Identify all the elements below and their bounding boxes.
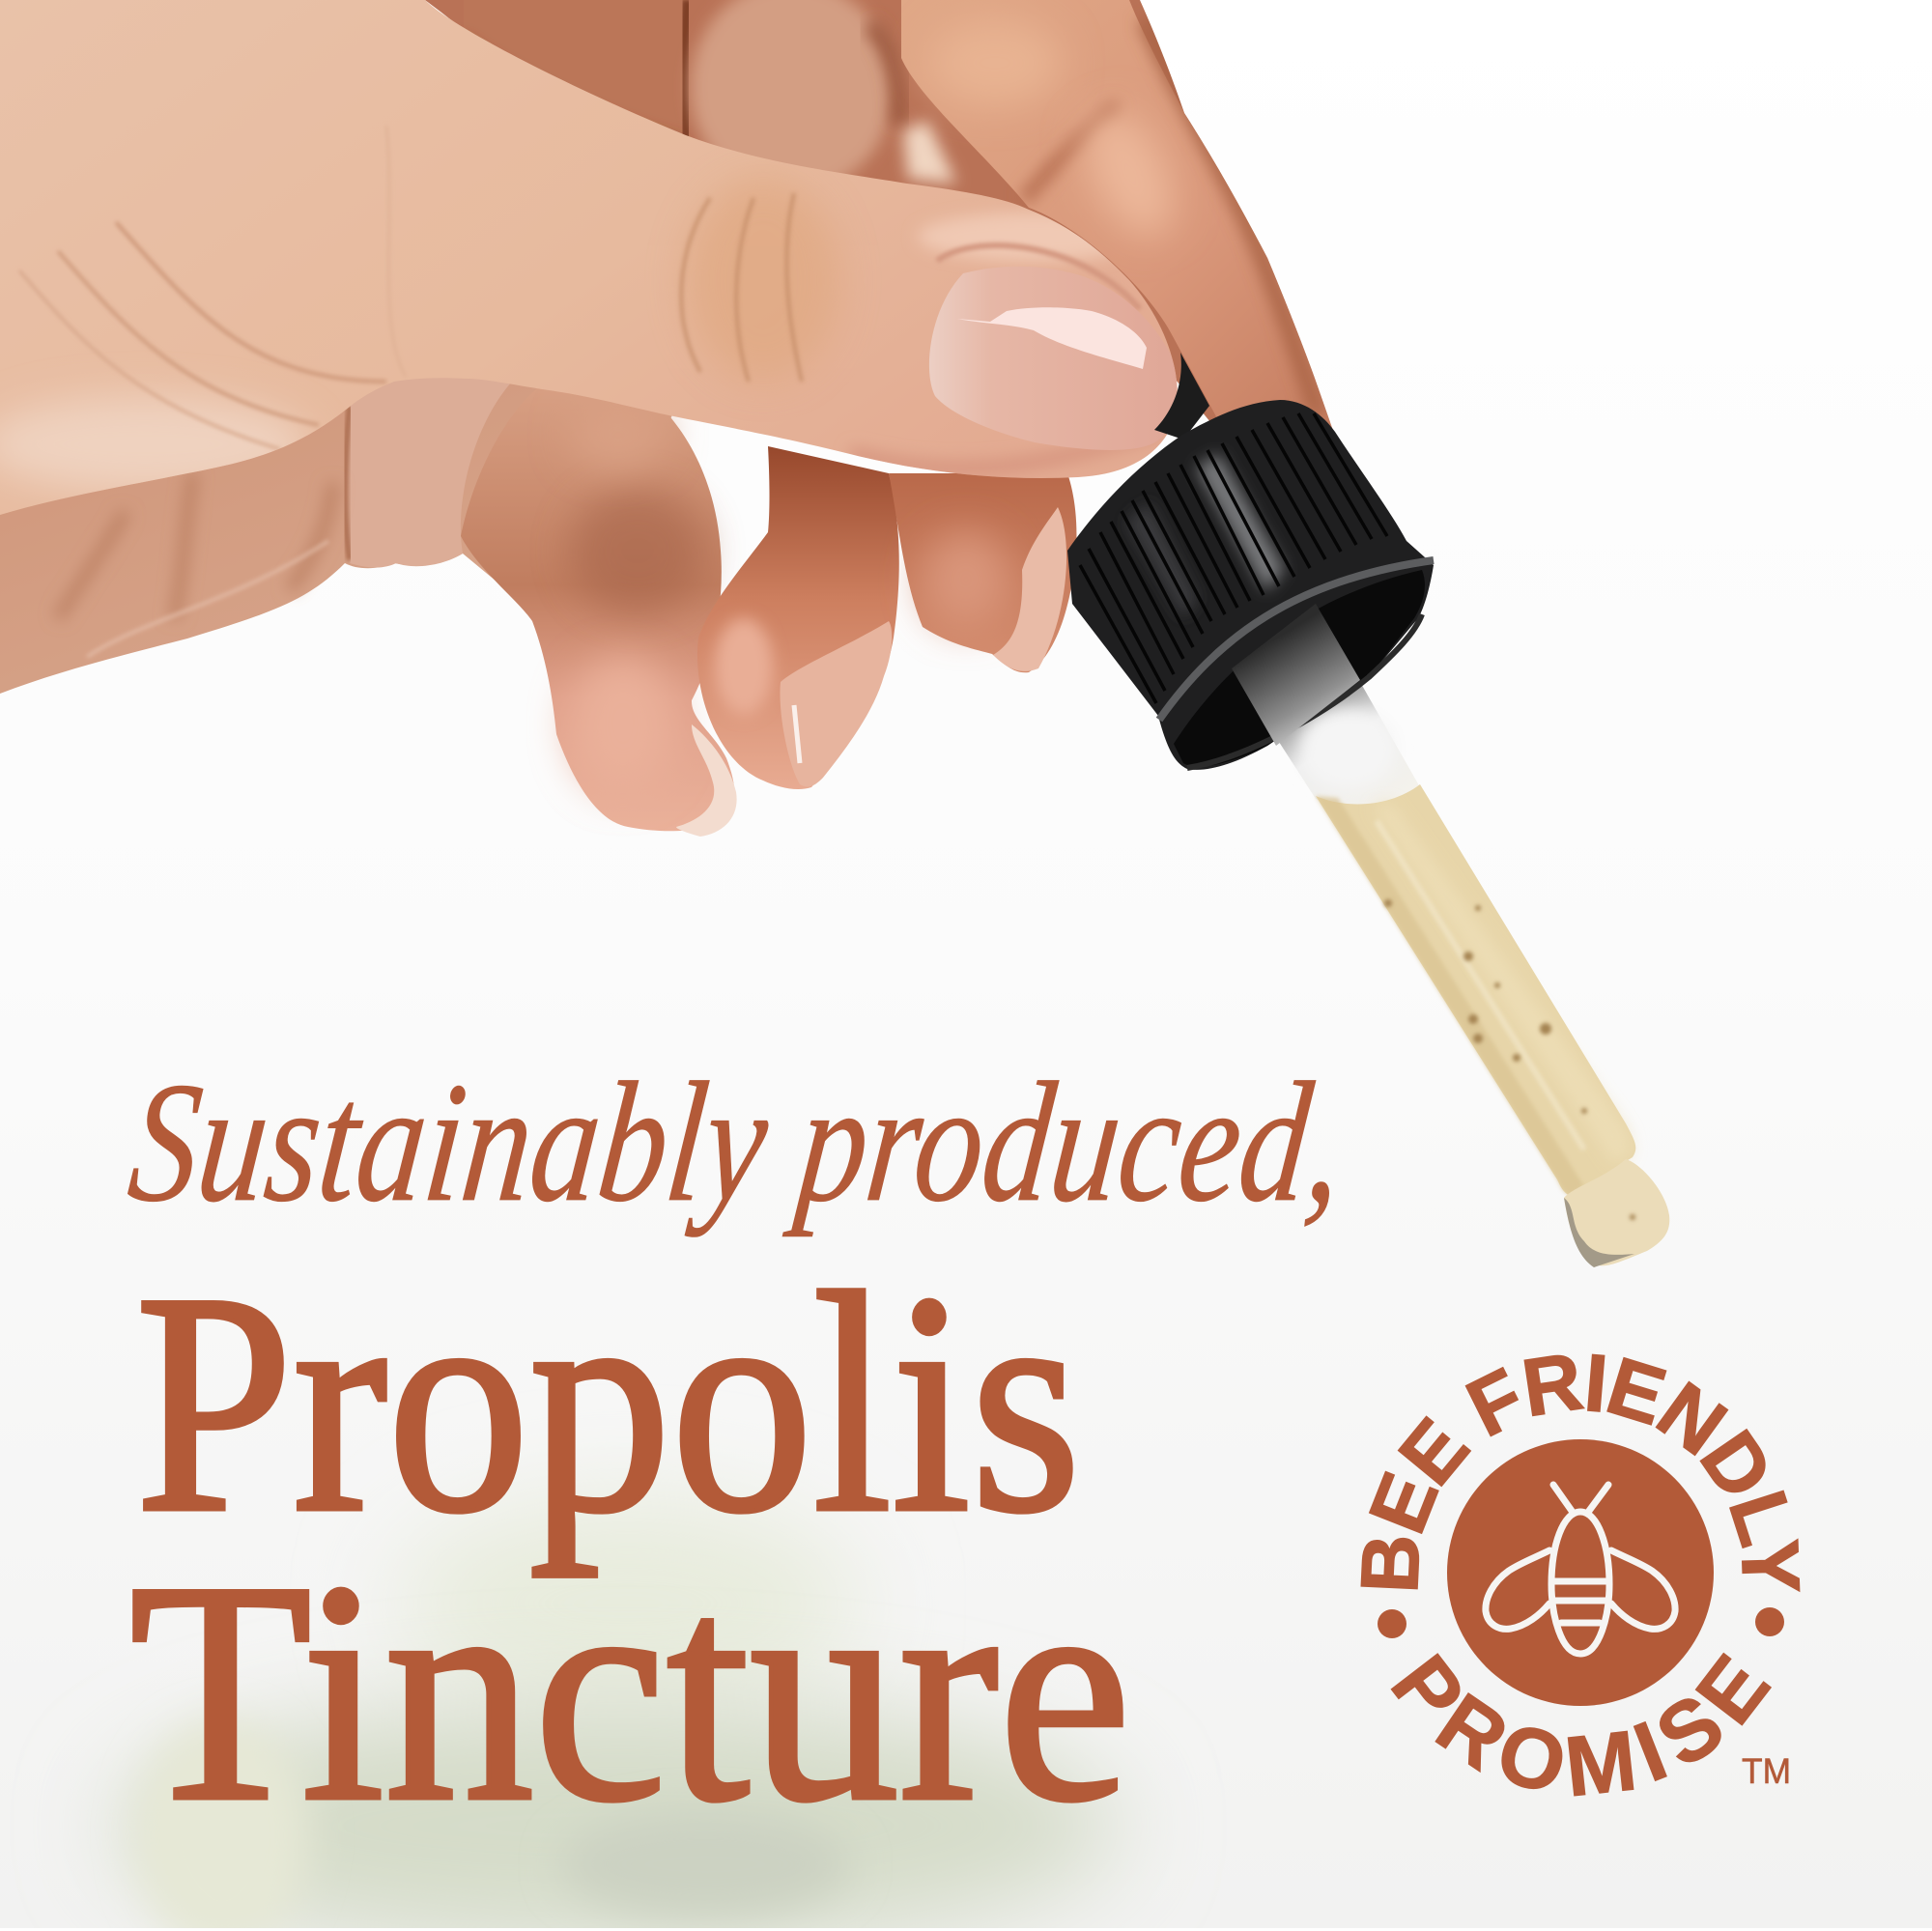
thumb — [0, 0, 1178, 515]
cap sheen — [1196, 454, 1285, 591]
skin shading and creases — [686, 179, 840, 382]
stem above cap — [1154, 353, 1209, 440]
palm centre strip — [345, 372, 512, 568]
badge dots — [1378, 1607, 1784, 1638]
cap rim — [1159, 560, 1434, 720]
badge text bottom: PROMISE — [1391, 1652, 1772, 1797]
icon: bee — [1486, 1485, 1675, 1654]
badge: Bee Friendly Promise — [1360, 1354, 1801, 1797]
nail highlight — [957, 307, 1147, 369]
badge circle — [1447, 1439, 1714, 1706]
trademark: TM — [1742, 1751, 1791, 1791]
cap opening — [1174, 570, 1425, 767]
liquid — [1316, 784, 1635, 1196]
glass tube, upper empty section — [1232, 604, 1420, 806]
cap ribs — [1080, 413, 1387, 703]
subtitle: Sustainably produced, — [122, 1046, 1353, 1237]
title line 2: Tincture — [129, 1517, 1131, 1866]
badge text top: BEE FRIENDLY — [1360, 1354, 1801, 1592]
bulb tip — [1564, 1159, 1669, 1265]
tube inside cap — [1232, 604, 1360, 746]
title line 1: Propolis — [135, 1228, 1081, 1577]
photo: hand holding dropper — [0, 0, 1343, 837]
cream skin fold — [903, 121, 956, 184]
second finger — [691, 0, 894, 193]
right finger — [901, 0, 1338, 454]
back fingers behind the thumb — [415, 0, 1343, 464]
finger: middle — [889, 473, 1076, 672]
ring fingernail — [780, 621, 892, 786]
dropper cap — [1067, 353, 1434, 770]
cap body — [1067, 400, 1434, 770]
thumbnail — [929, 267, 1177, 450]
finger: ring — [697, 446, 899, 789]
dropper — [1232, 604, 1669, 1267]
palm — [0, 367, 676, 694]
sediment specks — [1384, 899, 1635, 1220]
little fingernail — [676, 724, 737, 837]
finger: little — [461, 384, 737, 837]
background — [0, 1353, 1932, 1928]
